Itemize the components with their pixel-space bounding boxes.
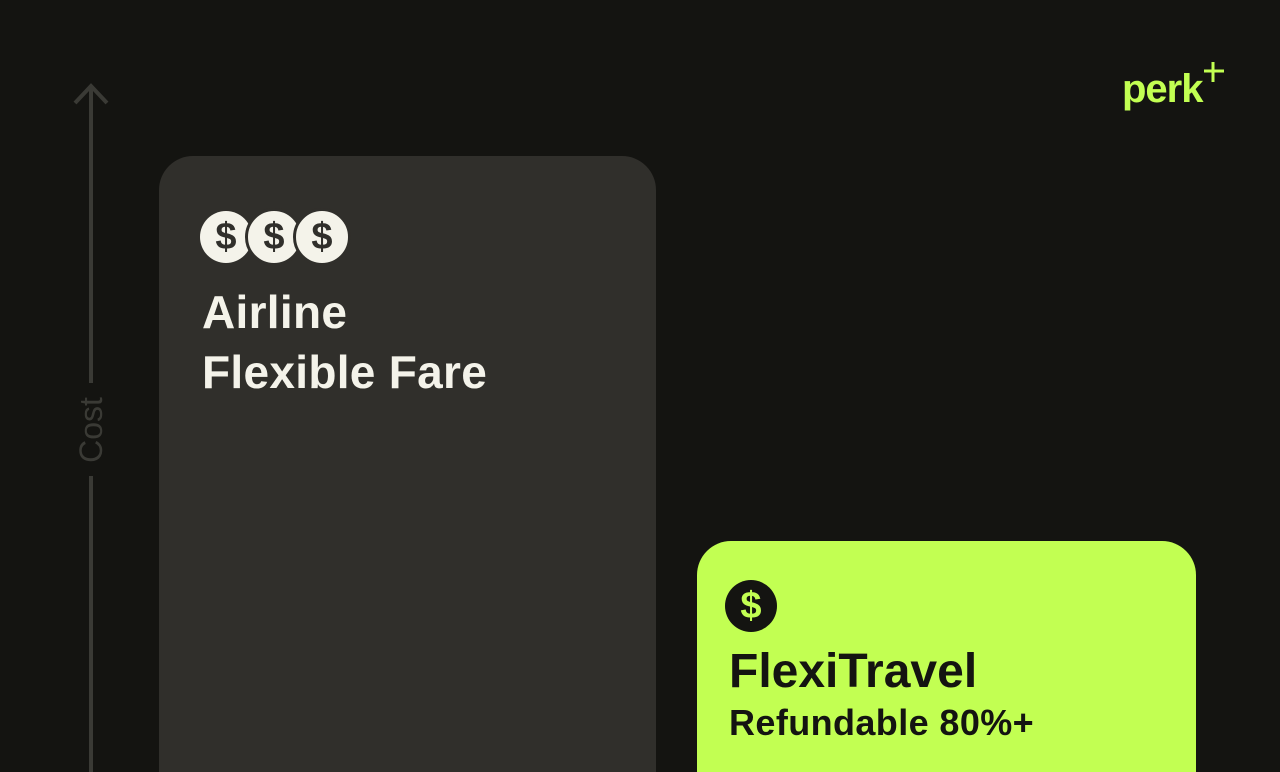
icon: dollar coin [725,580,777,632]
icon: three dollar coins [200,211,348,263]
heading: FlexiTravel [729,645,977,698]
axis label: Cost [73,397,109,463]
heading: Airline [202,286,347,338]
icon: three dollar coins: $ [311,216,333,258]
axis: cost arrow [73,83,109,772]
subheading: Refundable 80%+ [729,702,1034,743]
icon: three dollar coins: $ [215,216,237,258]
heading: Flexible Fare [202,346,487,398]
panel: flexitravel [697,541,1196,772]
icon: dollar coin: $ [740,585,762,627]
heading [202,286,487,398]
icon: three dollar coins: $ [263,216,285,258]
panel: airline flexible fare [159,156,656,772]
logo: perk: perk [1122,67,1202,111]
